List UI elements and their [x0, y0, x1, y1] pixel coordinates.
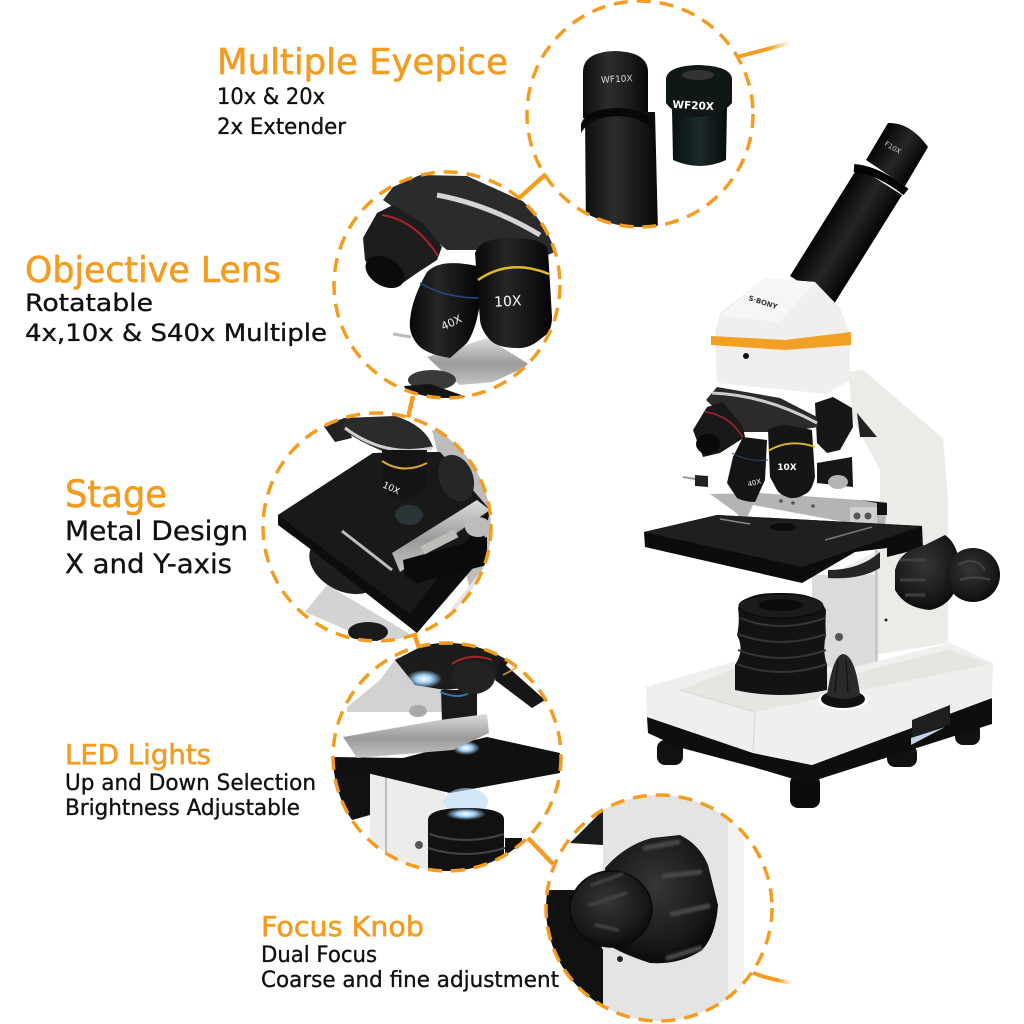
icon: WF10X eyepiece: [581, 51, 658, 232]
circle: eyepieces detail: [527, 1, 753, 232]
LED glow: [444, 788, 488, 809]
connector: focus knob to microscope: [753, 973, 793, 983]
heading block: Stage: X and Y-axis: [65, 549, 232, 580]
eyepiece tube: F10X: [883, 140, 902, 156]
objective 10X: 10X: [381, 481, 401, 497]
circle: focus knob detail: [540, 790, 780, 1024]
orange band: [711, 332, 851, 350]
head: [711, 278, 851, 394]
arm and column: [812, 370, 948, 665]
icon: WF20X eyepiece: WF20X: [672, 99, 714, 113]
red objective fragment: [323, 418, 352, 442]
mechanical stage: [392, 500, 491, 583]
heading block: LED Lights: [65, 738, 316, 821]
heading block: Multiple Eyepice: 2x Extender: [217, 115, 347, 140]
heading block: Objective Lens: Rotatable: [25, 289, 153, 317]
stage plate: [278, 452, 490, 633]
heading block: Stage: Metal Design: [65, 516, 248, 547]
base: [646, 643, 993, 783]
main microscope: [644, 123, 1000, 808]
collector lens: [415, 808, 522, 875]
circle: stage detail: [260, 410, 495, 645]
heading block: Stage: Stage: [65, 473, 167, 516]
connector: stage to LED: [415, 636, 419, 648]
brightness knob: [818, 654, 868, 710]
connector: eyepiece circle to microscope: [737, 43, 790, 57]
rear objective: [815, 397, 877, 453]
circle: objective lens detail: [334, 172, 560, 398]
heading block: Objective Lens: 4x,10x & S40x Multiple: [25, 319, 327, 347]
circle: LED lights detail: [330, 640, 565, 875]
heading block: Stage: [65, 473, 248, 580]
focus knobs: [895, 535, 1000, 610]
stage: [644, 515, 923, 583]
heading block: LED Lights: LED Lights: [65, 738, 211, 771]
heading block: Focus Knob: Coarse and fine adjustment: [261, 968, 559, 993]
dark knob at bottom: [348, 622, 388, 642]
mechanical stage: [343, 705, 489, 758]
nosepiece: [706, 387, 818, 432]
icon: WF20X eyepiece: [666, 65, 732, 166]
connector: eyepiece to objective: [518, 174, 546, 199]
icon: WF10X eyepiece: WF10X: [601, 74, 633, 86]
dial under stage: [828, 552, 880, 578]
heading block: Objective Lens: [25, 250, 327, 347]
objective: red band: [693, 402, 745, 457]
connector: objective to stage: [408, 396, 413, 418]
eyepiece tube: [790, 123, 928, 304]
objective: red band: [363, 205, 442, 288]
heading block: Multiple Eyepice: [217, 42, 508, 140]
silver stage clip: [427, 338, 530, 385]
light collector: [735, 593, 827, 695]
nosepiece: [383, 175, 554, 255]
heading block: Objective Lens: Objective Lens: [25, 250, 281, 291]
feet: [657, 722, 980, 808]
nosepiece: [343, 416, 433, 452]
objective: 40X: [410, 263, 480, 358]
mechanical stage: [683, 475, 887, 527]
objective: 40X: 40X: [747, 477, 762, 489]
stage plate: [333, 737, 560, 793]
objective 10X: [381, 450, 427, 499]
objective: 10X: [768, 425, 815, 498]
objective: 40X: [727, 437, 768, 502]
heading block: Focus Knob: Dual Focus: [261, 943, 377, 968]
rear objective: [438, 454, 474, 501]
connector: LED to focus knob: [528, 838, 553, 864]
icon: large focus knob: [605, 835, 718, 963]
black rail behind stage: [817, 457, 853, 487]
light hole: [395, 505, 423, 525]
icon: small focus knob: [570, 871, 652, 947]
objective: 10X: [475, 238, 552, 348]
heading block: Focus Knob: [261, 910, 559, 993]
heading block: Multiple Eyepice: Multiple Eyepice: [217, 42, 508, 83]
objective: 10X: 10X: [494, 293, 522, 311]
dimmer wheel: [912, 705, 950, 738]
heading block: Multiple Eyepice: 10x & 20x: [217, 85, 325, 110]
head: S·BONY: [747, 294, 779, 311]
heading block: LED Lights: Up and Down Selection: [65, 771, 316, 796]
objective: 40X: 40X: [439, 312, 464, 333]
objective: 10X: 10X: [777, 463, 797, 473]
heading block: Focus Knob: Focus Knob: [261, 910, 424, 943]
nosepiece and objectives: [395, 643, 544, 720]
heading block: LED Lights: Brightness Adjustable: [65, 796, 300, 821]
dial under stage: [309, 549, 366, 594]
